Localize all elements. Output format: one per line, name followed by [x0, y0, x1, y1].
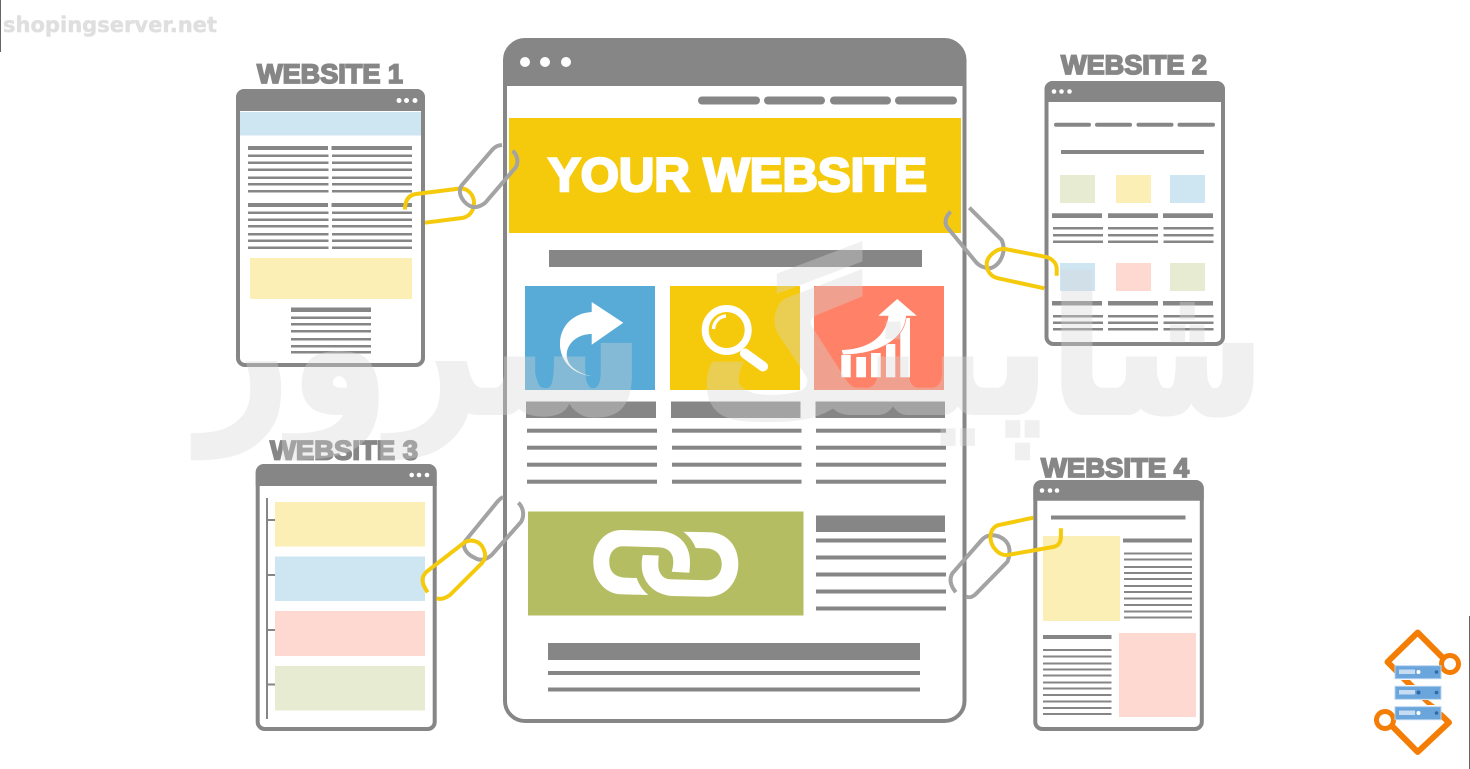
chain: website 2 link	[946, 208, 1057, 288]
browser frame	[1033, 480, 1204, 729]
navigation and title	[1054, 123, 1215, 154]
heading: website 4: WEBSITE 4	[1041, 453, 1189, 483]
chain: website 1 link	[405, 145, 517, 223]
upper text column	[1123, 538, 1192, 618]
site address watermark: shopingserver.net	[3, 13, 217, 37]
tree line	[266, 498, 276, 719]
column text blocks	[526, 402, 946, 484]
heading: website 3: WEBSITE 3	[270, 436, 418, 466]
navigation pills	[698, 96, 957, 104]
lower text column	[1043, 635, 1112, 715]
panel: website 3	[256, 436, 437, 729]
tile: growth chart	[814, 286, 944, 390]
side text block	[816, 516, 946, 610]
panel: website 4	[1033, 453, 1204, 729]
chain: website 4 link	[950, 518, 1061, 597]
browser frame	[236, 89, 425, 365]
tile: share arrow	[525, 286, 655, 390]
header banner	[240, 112, 421, 136]
text columns	[248, 146, 412, 249]
yellow block	[250, 258, 412, 299]
panel: website 1	[236, 59, 425, 365]
panel: website 2	[1044, 50, 1225, 344]
heading: website 2: WEBSITE 2	[1061, 50, 1207, 80]
panel: your website	[503, 38, 966, 721]
pink image block	[1119, 633, 1196, 717]
logo: server icon	[1376, 632, 1458, 752]
browser frame	[503, 38, 966, 721]
text rows	[1052, 213, 1214, 330]
yellow image block	[1043, 536, 1120, 621]
banner	[509, 118, 961, 233]
list rows	[275, 502, 425, 710]
large persian watermark: ‮شاپینگ سرور‬	[192, 240, 1265, 459]
browser frame	[1044, 81, 1225, 344]
heading: your website: YOUR WEBSITE	[548, 148, 927, 201]
title bar	[1051, 516, 1186, 520]
heading: website 1: WEBSITE 1	[257, 59, 403, 89]
chain: website 3 link	[423, 497, 523, 599]
colour tiles	[1060, 175, 1205, 291]
tile: chain link	[528, 512, 804, 616]
tile: magnifier	[670, 286, 800, 390]
browser frame	[256, 464, 437, 729]
footer text block	[548, 643, 920, 692]
subtitle bar	[549, 250, 922, 267]
footer text	[291, 308, 371, 354]
